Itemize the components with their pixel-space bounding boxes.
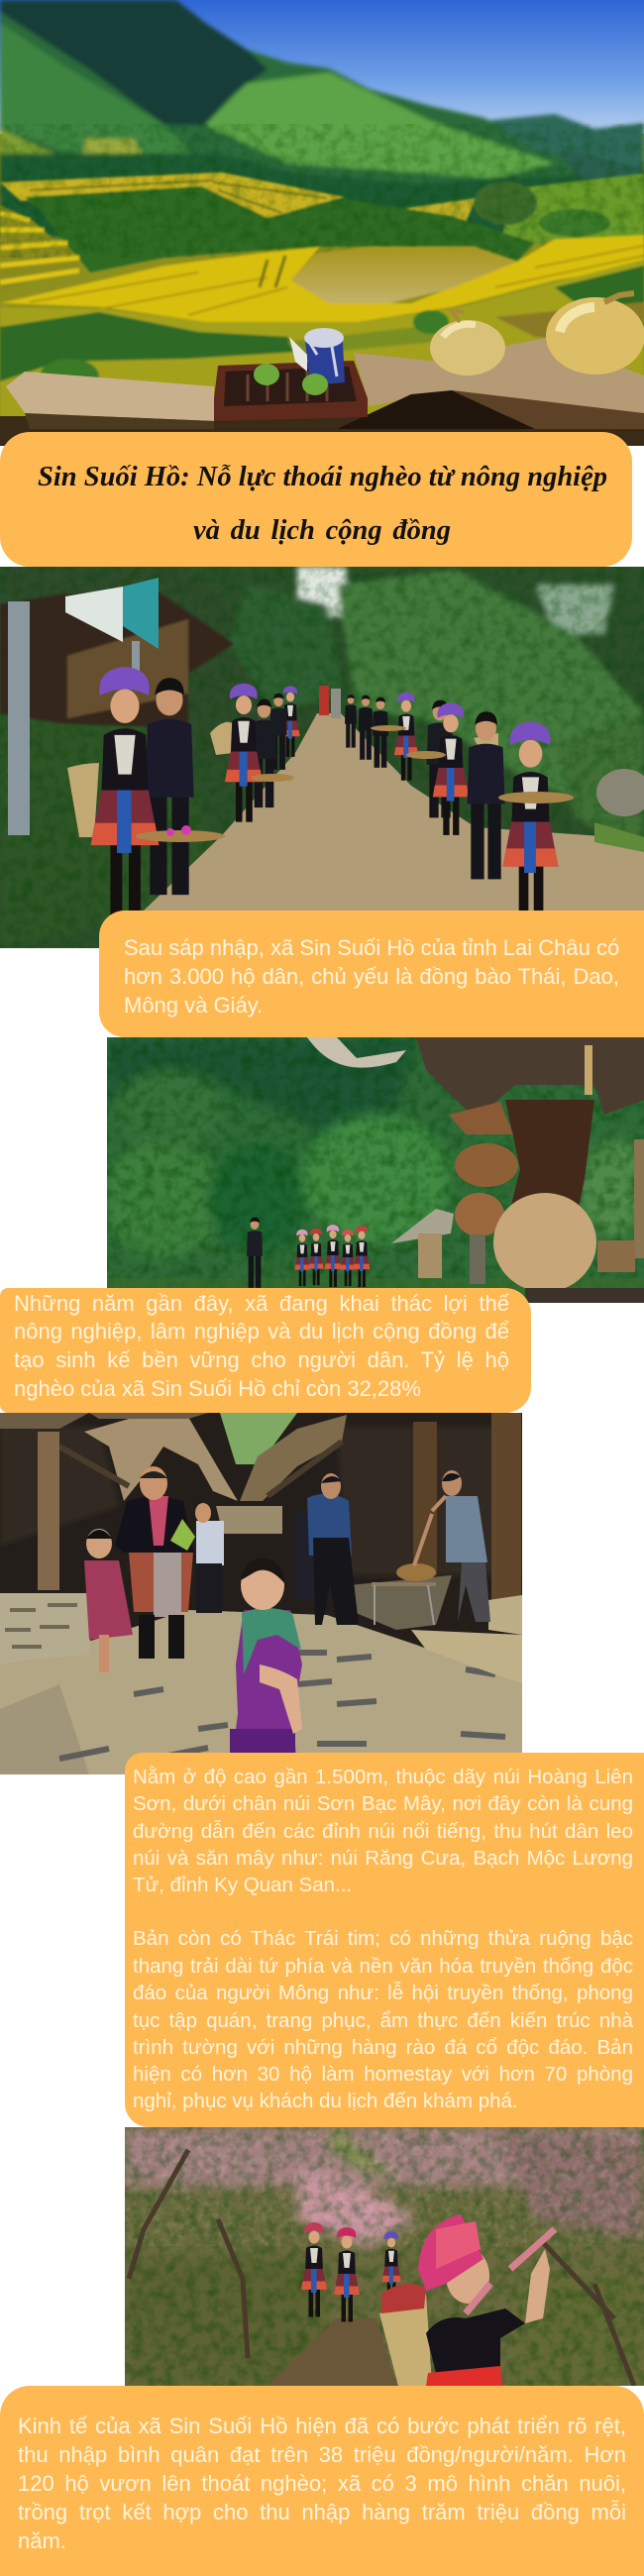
- photo: child in Mong dress at a thatched village: [0, 1413, 522, 1774]
- stone walls: [0, 1575, 522, 1684]
- man in blue shirt: [295, 1473, 359, 1625]
- text panel: location and culture: đáo của người Mông như: lễ hội truyền thống, phong: [133, 1982, 633, 2004]
- wooden pillars: [38, 1413, 521, 1601]
- text panel: economy: năm.: [18, 2528, 66, 2553]
- thatched hut: [391, 1209, 454, 1278]
- text panel: location and culture: Tử, đỉnh Ky Quan San...: [133, 1874, 352, 1896]
- text panel: livelihoods and poverty rate: nghèo của xã Sin Suối Hồ chỉ còn 32,28%: [14, 1376, 421, 1401]
- text panel: location and culture: núi và săn mây như: núi Răng Cưa, Bạch Mộc Lương: [133, 1847, 633, 1870]
- text panel: economy: 120 hộ vươn lên thoát nghèo; xã có 3 mô hình chăn nuôi,: [18, 2471, 626, 2496]
- Mong woman with basket: [379, 2214, 555, 2386]
- text panel: location and culture: thang trải dài tứ phía và nền văn hóa truyền thống độc: [133, 1955, 633, 1978]
- tea tray: [214, 361, 368, 421]
- text panel: population: Sau sáp nhập, xã Sin Suối Hồ của tỉnh Lai Châu có: [124, 935, 619, 960]
- figures on the path: [301, 2222, 401, 2322]
- man in white shirt: [195, 1503, 224, 1613]
- photo: tree with wooden signs and tourists in the forest: [107, 1037, 644, 1303]
- tree trunk with thatch canopy: [307, 1037, 644, 1258]
- group of tourists: [294, 1225, 370, 1287]
- photographer: [247, 1218, 263, 1288]
- toddler in purple dress: [230, 1558, 302, 1774]
- text panel: economy: trồng trọt kết hợp cho thu nhập hàng trăm triệu đồng mỗi: [18, 2500, 626, 2524]
- woman carrying greens: [115, 1466, 195, 1659]
- terraces and forest: [0, 172, 644, 292]
- text panel: location and culture: Nằm ở độ cao gần 1.500m, thuộc dãy núi Hoàng Liên: [133, 1766, 633, 1788]
- text panel: location and culture: [125, 1753, 644, 2127]
- wooden bench: [0, 338, 644, 446]
- cobbled ground: [0, 1610, 522, 1774]
- teapot: [289, 328, 345, 384]
- thatch roofs: [0, 1413, 347, 1534]
- visitors in the distance: [319, 686, 341, 718]
- heading: article title: và du lịch cộng đồng: [193, 515, 451, 546]
- text panel: livelihoods and poverty rate: nông nghiệp, lâm nghiệp và du lịch cộng đồng để: [14, 1319, 509, 1343]
- tea cups: [254, 364, 328, 395]
- text panel: population: hơn 3.000 hộ dân, chủ yếu là đồng bào Thái, Dao,: [124, 964, 619, 989]
- photo: villagers in Mong dress lining a road: [0, 567, 644, 948]
- girl in floral dress: [84, 1529, 133, 1672]
- table and pot: [372, 1563, 436, 1625]
- man stirring the pot: [414, 1470, 490, 1622]
- villagers right row: [345, 693, 574, 925]
- heading: article title: [0, 432, 632, 567]
- sky: [0, 0, 644, 134]
- text panel: location and culture: đường dẫn đến các đỉnh núi nổi tiếng, thu hút dân leo: [133, 1820, 633, 1843]
- tree trunks: [129, 2150, 634, 2386]
- text panel: livelihoods and poverty rate: tạo sinh kế bền vững cho người dân. Tỷ lệ hộ: [14, 1347, 509, 1372]
- wooden signs: [449, 1102, 644, 1303]
- heading: article title: Sin Suối Hồ: Nỗ lực thoái nghèo từ nông nghiệp: [38, 462, 607, 492]
- yellow rice field, pond and foreground: [0, 235, 644, 446]
- rock: [596, 769, 644, 816]
- text panel: economy: Kinh tế của xã Sin Suối Hồ hiện đã có bước phát triển rõ rệt,: [18, 2414, 626, 2438]
- text panel: population: Mông và Giáy.: [124, 993, 263, 1018]
- text panel: economy: thu nhập bình quân đạt trên 38 triệu đồng/người/năm. Hơn: [18, 2442, 626, 2467]
- text panel: location and culture: Bản còn có Thác Trái tim; có những thửa ruộng bậc: [133, 1927, 633, 1950]
- dirt road: [129, 713, 644, 948]
- signboard: [8, 578, 159, 835]
- pumpkins: [430, 293, 644, 376]
- text panel: livelihoods and poverty rate: Những năm gần đây, xã đang khai thác lợi thế: [14, 1291, 509, 1316]
- mountains: [0, 0, 644, 238]
- text panel: location and culture: nghỉ, phục vụ khách du lịch đến khám phá.: [133, 2090, 518, 2112]
- text panel: population: [99, 911, 644, 1037]
- text panel: location and culture: trình tường với những hàng rào đá cổ độc đáo. Bản: [133, 2036, 633, 2059]
- text panel: location and culture: hiện có hơn 30 hộ làm homestay với hơn 70 phòng: [133, 2063, 633, 2086]
- photo: terraced rice fields with pond and tea tray: [0, 0, 644, 446]
- photo: peach blossom garden with Mong woman: [125, 2127, 644, 2386]
- villagers left row: [67, 667, 300, 917]
- text panel: location and culture: tục tập quán, trang phục, ẩm thực đến kiến trúc nhà: [133, 2009, 633, 2032]
- text panel: economy: [0, 2386, 644, 2576]
- text panel: livelihoods and poverty rate: [0, 1288, 531, 1413]
- text panel: location and culture: Sơn, dưới chân núi Sơn Bạc Mây, nơi đây còn là cung: [133, 1792, 633, 1815]
- wooden house: [0, 591, 234, 728]
